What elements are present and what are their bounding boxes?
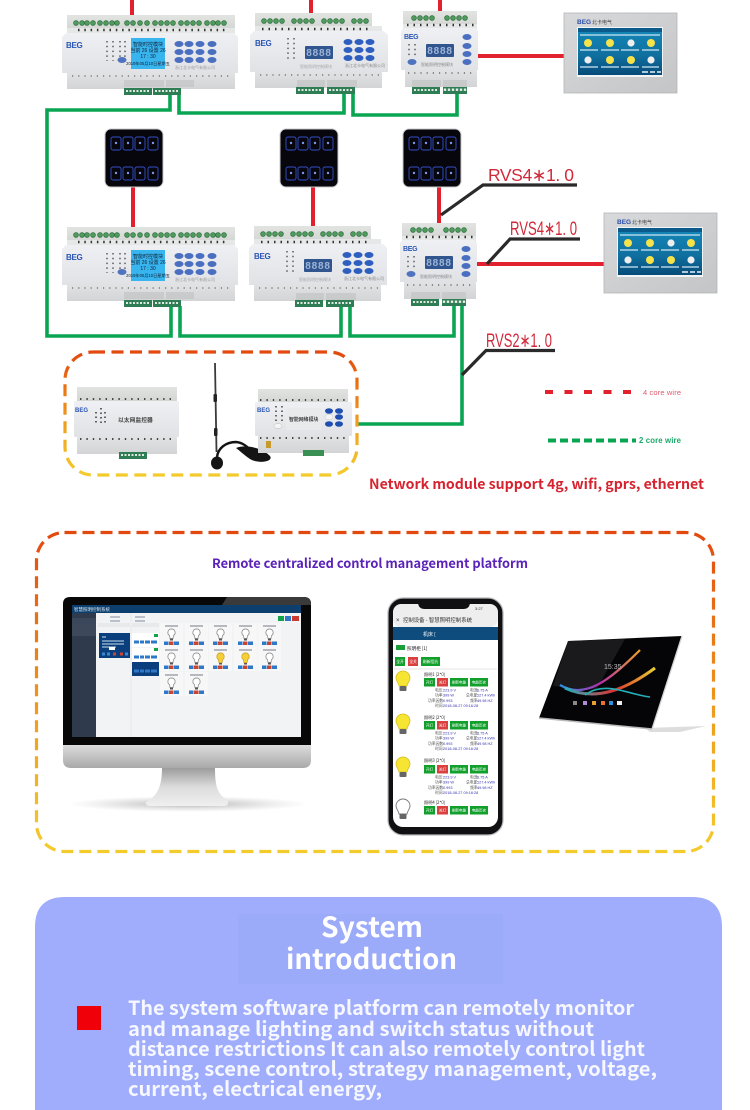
module: 4-way controller row 2 — [400, 223, 477, 306]
module: 8-way controller row 1 — [250, 13, 388, 94]
panel: system introduction — [35, 897, 722, 1110]
heading: platform title: Remote centralized control management platform — [212, 553, 528, 572]
monitor screen — [72, 605, 301, 737]
smartphone app: 照明2 [2*0] — [424, 715, 445, 721]
smartphone app: × — [396, 618, 400, 624]
module: 12-way controller row 1 — [62, 15, 238, 95]
smartphone app: 照明柜 [1] — [407, 645, 428, 652]
green wires, 2 core — [47, 93, 462, 424]
heading: system introduction: System — [321, 906, 423, 946]
touch panel row 1 — [564, 13, 677, 93]
heading: system introduction — [286, 906, 457, 978]
legend: 4 core wire — [545, 388, 681, 397]
touch switch 1 — [105, 129, 163, 187]
body text: current, electrical energy, — [128, 1073, 382, 1102]
smartphone app — [388, 598, 503, 835]
callout: RVS4*1.0 switch cable: RVS4∗1. 0 — [488, 165, 574, 185]
red wires, 4 core — [132, 0, 604, 264]
body text: The system software platform can remotely monitor — [128, 992, 634, 1021]
callout: RVS4*1.0 switch cable — [441, 165, 577, 215]
panel: remote centralized control platform — [36, 532, 714, 852]
desktop monitor — [63, 597, 311, 812]
ethernet monitor controller: 以太网监控器 — [118, 415, 153, 424]
smartphone app: 3:27 — [475, 606, 484, 611]
monitor screen: 智慧照明控制系统 — [74, 606, 110, 613]
smartphone app: 控制设备 - 智慧照明控制系统 — [403, 616, 473, 624]
smart network module: BEG — [257, 408, 270, 414]
body text: and manage lighting and switch status without — [128, 1013, 594, 1042]
smartphone app: 照明4 [2*0] — [424, 800, 445, 806]
module: 8-way controller row 2 — [249, 226, 387, 307]
body text: timing, scene control, strategy management, voltage, — [128, 1053, 657, 1082]
callout: RVS2*1.0 bus cable — [462, 330, 555, 375]
body text — [128, 992, 657, 1102]
panel: network module group — [65, 352, 357, 475]
tablet — [539, 636, 706, 732]
smart network module — [255, 389, 352, 456]
ethernet monitor controller: BEG — [75, 408, 88, 414]
legend: 2 core wire: 2 core wire — [639, 436, 682, 445]
antenna — [211, 363, 271, 470]
legend: 2 core wire — [548, 436, 682, 445]
tablet: 15:35 — [604, 664, 622, 671]
heading: system introduction: introduction — [286, 938, 457, 978]
callout: RVS4*1.0 panel cable: RVS4∗1. 0 — [510, 218, 577, 240]
touch switch 3 — [403, 129, 461, 187]
smartphone app: 全关 — [409, 659, 417, 664]
touch switch 2 — [280, 129, 338, 187]
caption: network module support: Network module support 4g, wifi, gprs, ethernet — [369, 474, 704, 494]
smart network module: 智能网络模块 — [289, 416, 318, 423]
touch panel row 2 — [604, 213, 717, 293]
icon: red square bullet — [77, 1006, 101, 1030]
smartphone app: 照明3 [2*0] — [424, 758, 445, 764]
callout: RVS2*1.0 bus cable: RVS2∗1. 0 — [486, 330, 552, 352]
smartphone app: 全开 — [396, 659, 404, 664]
smartphone app: 机床 [ — [423, 631, 436, 638]
smartphone app: 刷新阻抗 — [423, 659, 438, 664]
legend: 4 core wire: 4 core wire — [643, 388, 681, 397]
body text: distance restrictions It can also remotely control light — [128, 1033, 645, 1062]
smartphone app: 照明1 [2*0] — [424, 672, 445, 678]
ethernet monitor controller — [74, 387, 179, 459]
module: 4-way controller row 1 — [401, 11, 478, 94]
callout: RVS4*1.0 panel cable — [487, 218, 580, 264]
module: 12-way controller row 2 — [62, 227, 238, 307]
